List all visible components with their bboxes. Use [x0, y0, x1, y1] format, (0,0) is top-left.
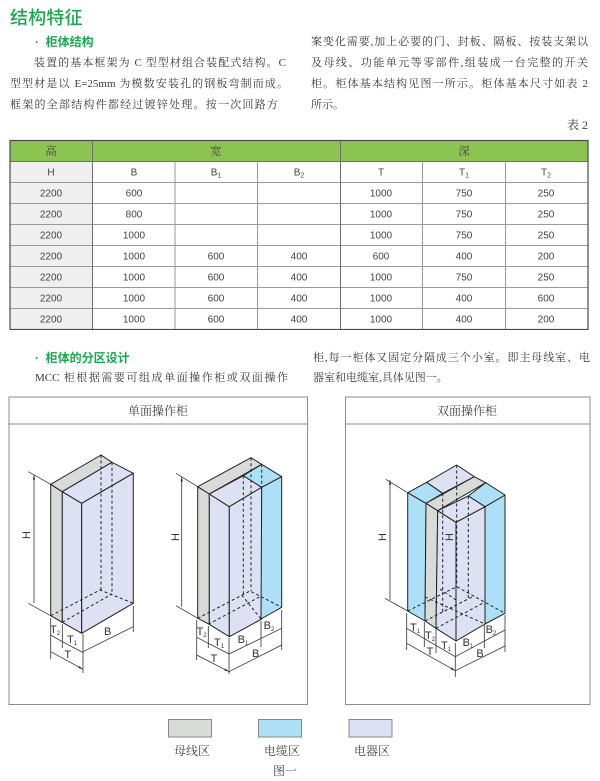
table: dimensions: 400 — [291, 314, 308, 326]
table: dimensions: 600 — [208, 294, 225, 304]
text block: cabinet structure left column: 型型材是以 E=25mm 为模数安装孔的钢板弯制而成。 — [10, 78, 288, 90]
title: 结构特征 — [10, 8, 83, 28]
panel: double-sided cabinet: 双面操作柜 — [437, 403, 497, 418]
table caption: 表 2 — [567, 118, 588, 132]
text block: cabinet structure left column: 装置的基本框架为 C 型型材组合装配式结构。C — [34, 57, 286, 69]
heading: partition design: · 柜体的分区设计 — [35, 351, 130, 365]
table: dimensions: 250 — [538, 230, 555, 242]
table: dimensions: 200 — [538, 314, 555, 326]
table: dimensions: 1000 — [370, 314, 393, 326]
table: dimensions: 2200 — [40, 272, 63, 284]
panel: double-sided cabinet: B — [486, 624, 493, 636]
table: dimensions: 2200 — [40, 210, 63, 220]
table: dimensions: 1000 — [123, 272, 146, 284]
text block: partition design right column: 柜,每一柜体又固定分隔成三个小室。即主母线室、电 — [313, 352, 590, 364]
table: dimensions: T — [459, 168, 465, 178]
table: dimensions: B — [131, 168, 138, 178]
panel: double-sided cabinet: T — [410, 622, 417, 634]
panel: double-sided cabinet: H — [377, 533, 389, 541]
panel: double-sided cabinet: T — [427, 646, 434, 658]
panel: single-sided cabinet: B — [104, 626, 111, 638]
text block: partition design right column — [313, 352, 590, 384]
panel: single-sided cabinet: B — [238, 634, 245, 646]
table: dimensions: 1 — [465, 172, 469, 180]
panel: single-sided cabinet: T — [67, 634, 74, 646]
text block: partition design left column: MCC 柜根据需要可组成单面操作柜或双面操作 — [35, 372, 288, 384]
panel: single-sided cabinet: 1 — [74, 641, 78, 647]
table: dimensions: 600 — [208, 252, 225, 262]
table: dimensions: 2 — [300, 172, 304, 180]
panel: single-sided cabinet: H — [170, 533, 182, 541]
table: dimensions: 2200 — [40, 314, 63, 326]
table: dimensions: 750 — [456, 188, 473, 200]
panel: single-sided cabinet: H — [21, 531, 33, 539]
text block: cabinet structure right column: 及母线、功能单元等零部件,组装成一台完整的开关 — [311, 57, 588, 69]
legend: swatches — [168, 720, 392, 737]
panel: single-sided cabinet: T — [197, 626, 203, 638]
dimension lines — [176, 473, 282, 674]
table: dimensions: 750 — [456, 210, 473, 220]
text block: cabinet structure right column: 所示。 — [311, 99, 344, 111]
panel: double-sided cabinet: B — [476, 648, 484, 660]
legend label: busbar zone: 母线区 — [174, 744, 210, 758]
table: dimensions: 宽 — [210, 145, 222, 158]
table: dimensions: 600 — [373, 252, 390, 262]
panel: double-sided cabinet: 1 — [470, 644, 474, 650]
table: dimensions: 1000 — [123, 294, 146, 304]
text block: cabinet structure right column: 案变化需要,加上必要的门、封板、隔板、按装支架以 — [311, 36, 588, 48]
table: dimensions: 2200 — [40, 230, 63, 242]
table: dimensions: 高 — [45, 144, 57, 158]
table: dimensions: 1000 — [370, 210, 393, 220]
table: dimensions: 400 — [291, 272, 308, 284]
table: dimensions: T — [541, 168, 547, 178]
panel: single-sided cabinet: 2 — [271, 627, 275, 633]
table: dimensions: 250 — [538, 188, 555, 200]
table: dimensions: 800 — [126, 210, 143, 220]
panel: single-sided cabinet: 2 — [203, 633, 207, 639]
table: dimensions: B — [294, 168, 300, 178]
table: dimensions: 600 — [538, 294, 555, 304]
panel: double-sided cabinet: H — [444, 533, 456, 541]
table: dimensions: 250 — [538, 210, 555, 220]
table: dimensions: 600 — [126, 188, 143, 200]
table: dimensions: 1000 — [370, 272, 393, 284]
panel: double-sided cabinet: 1 — [448, 647, 452, 653]
table: dimensions: 2200 — [40, 294, 63, 304]
panel: double-sided cabinet: T — [425, 630, 432, 642]
table: dimensions: 2200 — [40, 188, 63, 200]
table: dimensions: H — [47, 168, 55, 178]
panel: double-sided cabinet: T — [441, 640, 448, 652]
panel: single-sided cabinet: 单面操作柜 — [128, 403, 188, 418]
table: dimensions: 1000 — [370, 230, 393, 242]
table: dimensions: 1000 — [370, 188, 393, 200]
table: dimensions: T — [378, 168, 384, 178]
heading: cabinet structure: · 柜体结构 — [35, 35, 94, 49]
table: dimensions: 250 — [538, 272, 555, 284]
table: dimensions: 1000 — [123, 252, 146, 262]
table: dimensions: 750 — [456, 230, 473, 242]
cabinet diagram: bus, electrical, cable — [198, 458, 282, 637]
text block: partition design right column: 器室和电缆室,具体见图一。 — [313, 372, 448, 384]
text block: cabinet structure right column — [311, 36, 588, 111]
panel: single-sided cabinet: T — [50, 624, 57, 636]
table: dimensions: 2 — [547, 172, 551, 180]
table: dimensions: 400 — [291, 294, 308, 304]
table: dimensions: 400 — [456, 252, 473, 262]
panel: single-sided cabinet: T — [214, 637, 221, 649]
panel: single-sided cabinet: 1 — [245, 641, 249, 647]
dimension lines — [28, 472, 133, 673]
panel: double-sided cabinet: 2 — [432, 637, 436, 643]
legend label: electrical zone: 电器区 — [354, 744, 390, 758]
panel: single-sided cabinet: T — [64, 649, 71, 661]
cabinet diagram: double sided — [408, 465, 505, 641]
table: dimensions: 600 — [208, 272, 225, 284]
panel: single-sided cabinet: 2 — [57, 631, 61, 637]
panel: double-sided cabinet: 1 — [417, 629, 421, 635]
table: dimensions: 1000 — [123, 230, 146, 242]
table: dimensions: 400 — [456, 314, 473, 326]
table: dimensions: 400 — [456, 294, 473, 304]
text block: cabinet structure left column: 框架的全部结构件都经过镀锌处理。按一次回路方 — [10, 99, 278, 111]
text block: cabinet structure left column — [10, 56, 288, 111]
panel: single-sided cabinet: B — [252, 648, 259, 660]
table: dimensions: 深 — [458, 145, 470, 158]
figure caption: 图一 — [273, 764, 297, 778]
table: dimensions: B — [211, 168, 217, 178]
panel: single-sided cabinet — [9, 397, 308, 704]
table: dimensions: 2200 — [40, 252, 63, 262]
table: dimensions — [9, 140, 589, 330]
table: dimensions: 750 — [456, 272, 473, 284]
dimension lines — [385, 479, 505, 677]
panel: single-sided cabinet: B — [264, 620, 271, 632]
panel: single-sided cabinet: 1 — [221, 644, 225, 650]
panel: single-sided cabinet: T — [211, 653, 218, 665]
legend label: cable zone: 电缆区 — [264, 744, 300, 758]
table: dimensions: 1000 — [123, 314, 146, 326]
table: dimensions: 200 — [538, 252, 555, 262]
table: dimensions: 600 — [208, 314, 225, 326]
table: dimensions: 1 — [217, 172, 221, 180]
cabinet diagram: bus and electrical — [51, 455, 133, 633]
table: dimensions: 400 — [291, 252, 308, 262]
panel: double-sided cabinet: 2 — [493, 631, 497, 637]
table: dimensions: 1000 — [370, 294, 393, 304]
text block: cabinet structure right column: 柜。柜体基本结构见图一所示。柜体基本尺寸如表 2 — [311, 78, 588, 90]
panel: double-sided cabinet: B — [463, 637, 470, 649]
panel: double-sided cabinet — [346, 397, 590, 704]
